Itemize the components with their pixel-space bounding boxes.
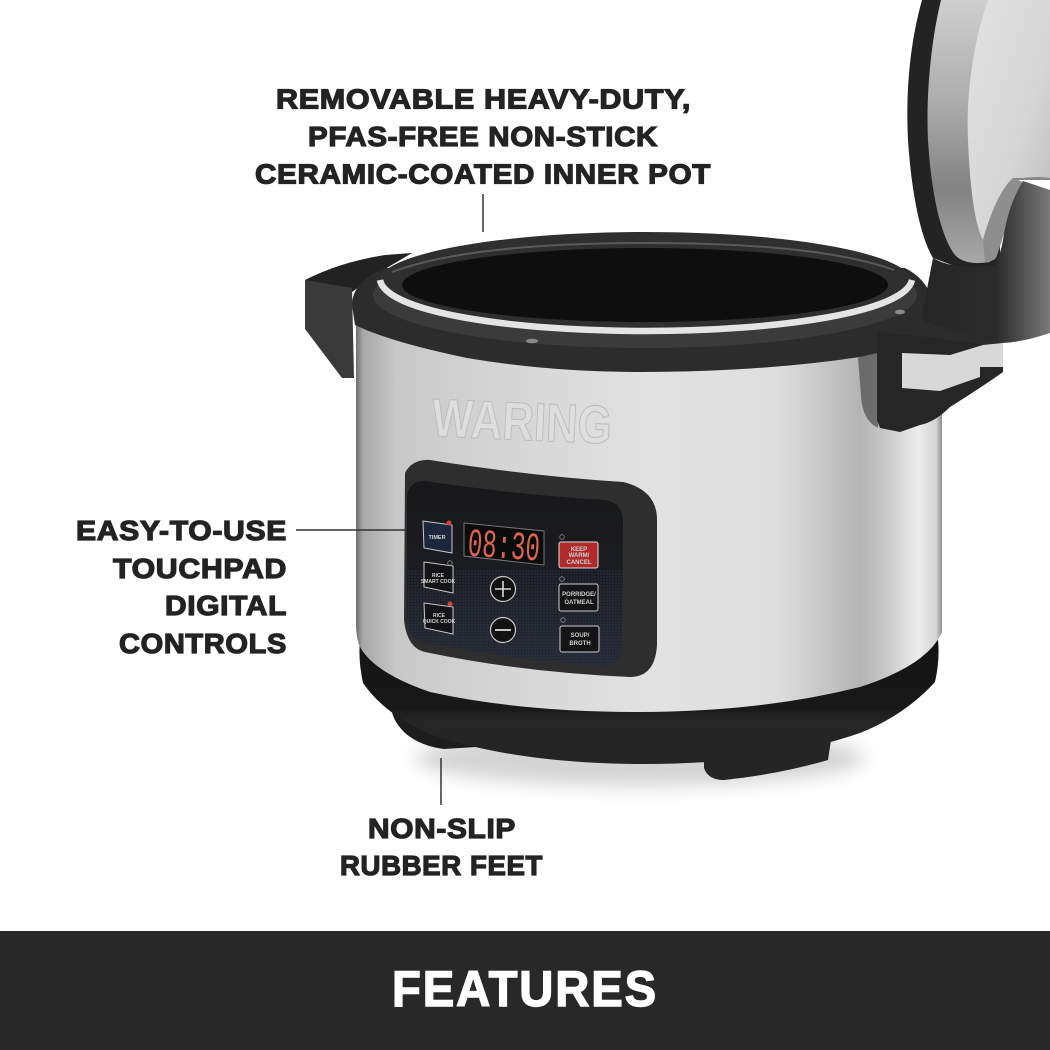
silver ring — [380, 280, 912, 331]
lid wedge — [983, 178, 1023, 262]
left handle — [305, 253, 412, 378]
lid dark edge — [907, 0, 1000, 268]
body shadow near bracket — [858, 350, 878, 428]
icon: rubber feet — [392, 712, 831, 780]
button: porridge oatmeal — [559, 577, 598, 611]
brand logo: WARING — [431, 388, 613, 456]
cooker illustration — [305, 0, 1050, 786]
ground shadow — [415, 730, 865, 786]
footer banner: FEATURES — [392, 961, 658, 1017]
callout: inner pot: PFAS-FREE NON-STICK — [308, 121, 658, 152]
lid face — [968, 0, 1050, 240]
callout: touchpad controls: DIGITAL — [165, 590, 287, 621]
stainless body — [356, 320, 942, 712]
callout: rubber feet — [340, 758, 543, 881]
callout: touchpad controls: EASY-TO-USE — [76, 515, 287, 546]
hinge clear insert — [902, 343, 1003, 391]
button: plus — [490, 576, 516, 602]
button: soup broth: BROTH — [569, 641, 591, 647]
callout: touchpad controls — [76, 515, 405, 659]
button: timer: TIMER — [428, 535, 446, 541]
button: keep warm cancel: KEEP — [571, 547, 587, 553]
lid hinge — [923, 181, 1050, 343]
button: soup broth: SOUP/ — [571, 633, 590, 639]
button: rice quick cook: RICE — [433, 613, 446, 619]
right hinge bracket — [877, 332, 1003, 432]
footer banner — [0, 931, 1050, 1050]
control panel — [404, 460, 657, 677]
inner pot lip — [378, 232, 912, 332]
lid steel — [928, 0, 1050, 263]
LED display: 08:30 — [466, 524, 541, 573]
callout: inner pot — [255, 84, 711, 232]
button: rice smart cook: SMART COOK — [421, 579, 455, 585]
button: keep warm cancel: CANCEL — [566, 560, 592, 566]
callout: inner pot: CERAMIC-COATED INNER POT — [255, 158, 711, 190]
button: rice smart cook — [421, 561, 455, 593]
button: soup broth — [560, 618, 599, 652]
button: porridge oatmeal: OATMEAL — [564, 600, 594, 606]
lip highlight — [392, 243, 894, 272]
callout: rubber feet: RUBBER FEET — [340, 850, 543, 881]
callout: touchpad controls: CONTROLS — [119, 628, 287, 659]
callout: rubber feet: NON-SLIP — [368, 813, 516, 844]
button: porridge oatmeal: PORRIDGE/ — [562, 592, 596, 598]
rim — [352, 268, 1003, 372]
chrome ledge — [373, 242, 917, 348]
button: timer — [423, 520, 452, 553]
callout: inner pot: REMOVABLE HEAVY-DUTY, — [276, 84, 691, 114]
ledge screws — [526, 339, 538, 343]
button: keep warm cancel — [559, 535, 598, 568]
callout: touchpad controls: TOUCHPAD — [113, 553, 287, 584]
button: rice smart cook: RICE — [432, 573, 445, 579]
button: keep warm cancel: WARM/ — [569, 553, 590, 559]
LED display — [464, 523, 544, 573]
button: rice quick cook: QUICK COOK — [423, 619, 456, 625]
panel dot texture — [407, 570, 622, 666]
black base — [359, 640, 939, 764]
inner pot well — [402, 248, 888, 322]
button: rice quick cook — [423, 602, 456, 634]
button: minus — [490, 618, 516, 642]
